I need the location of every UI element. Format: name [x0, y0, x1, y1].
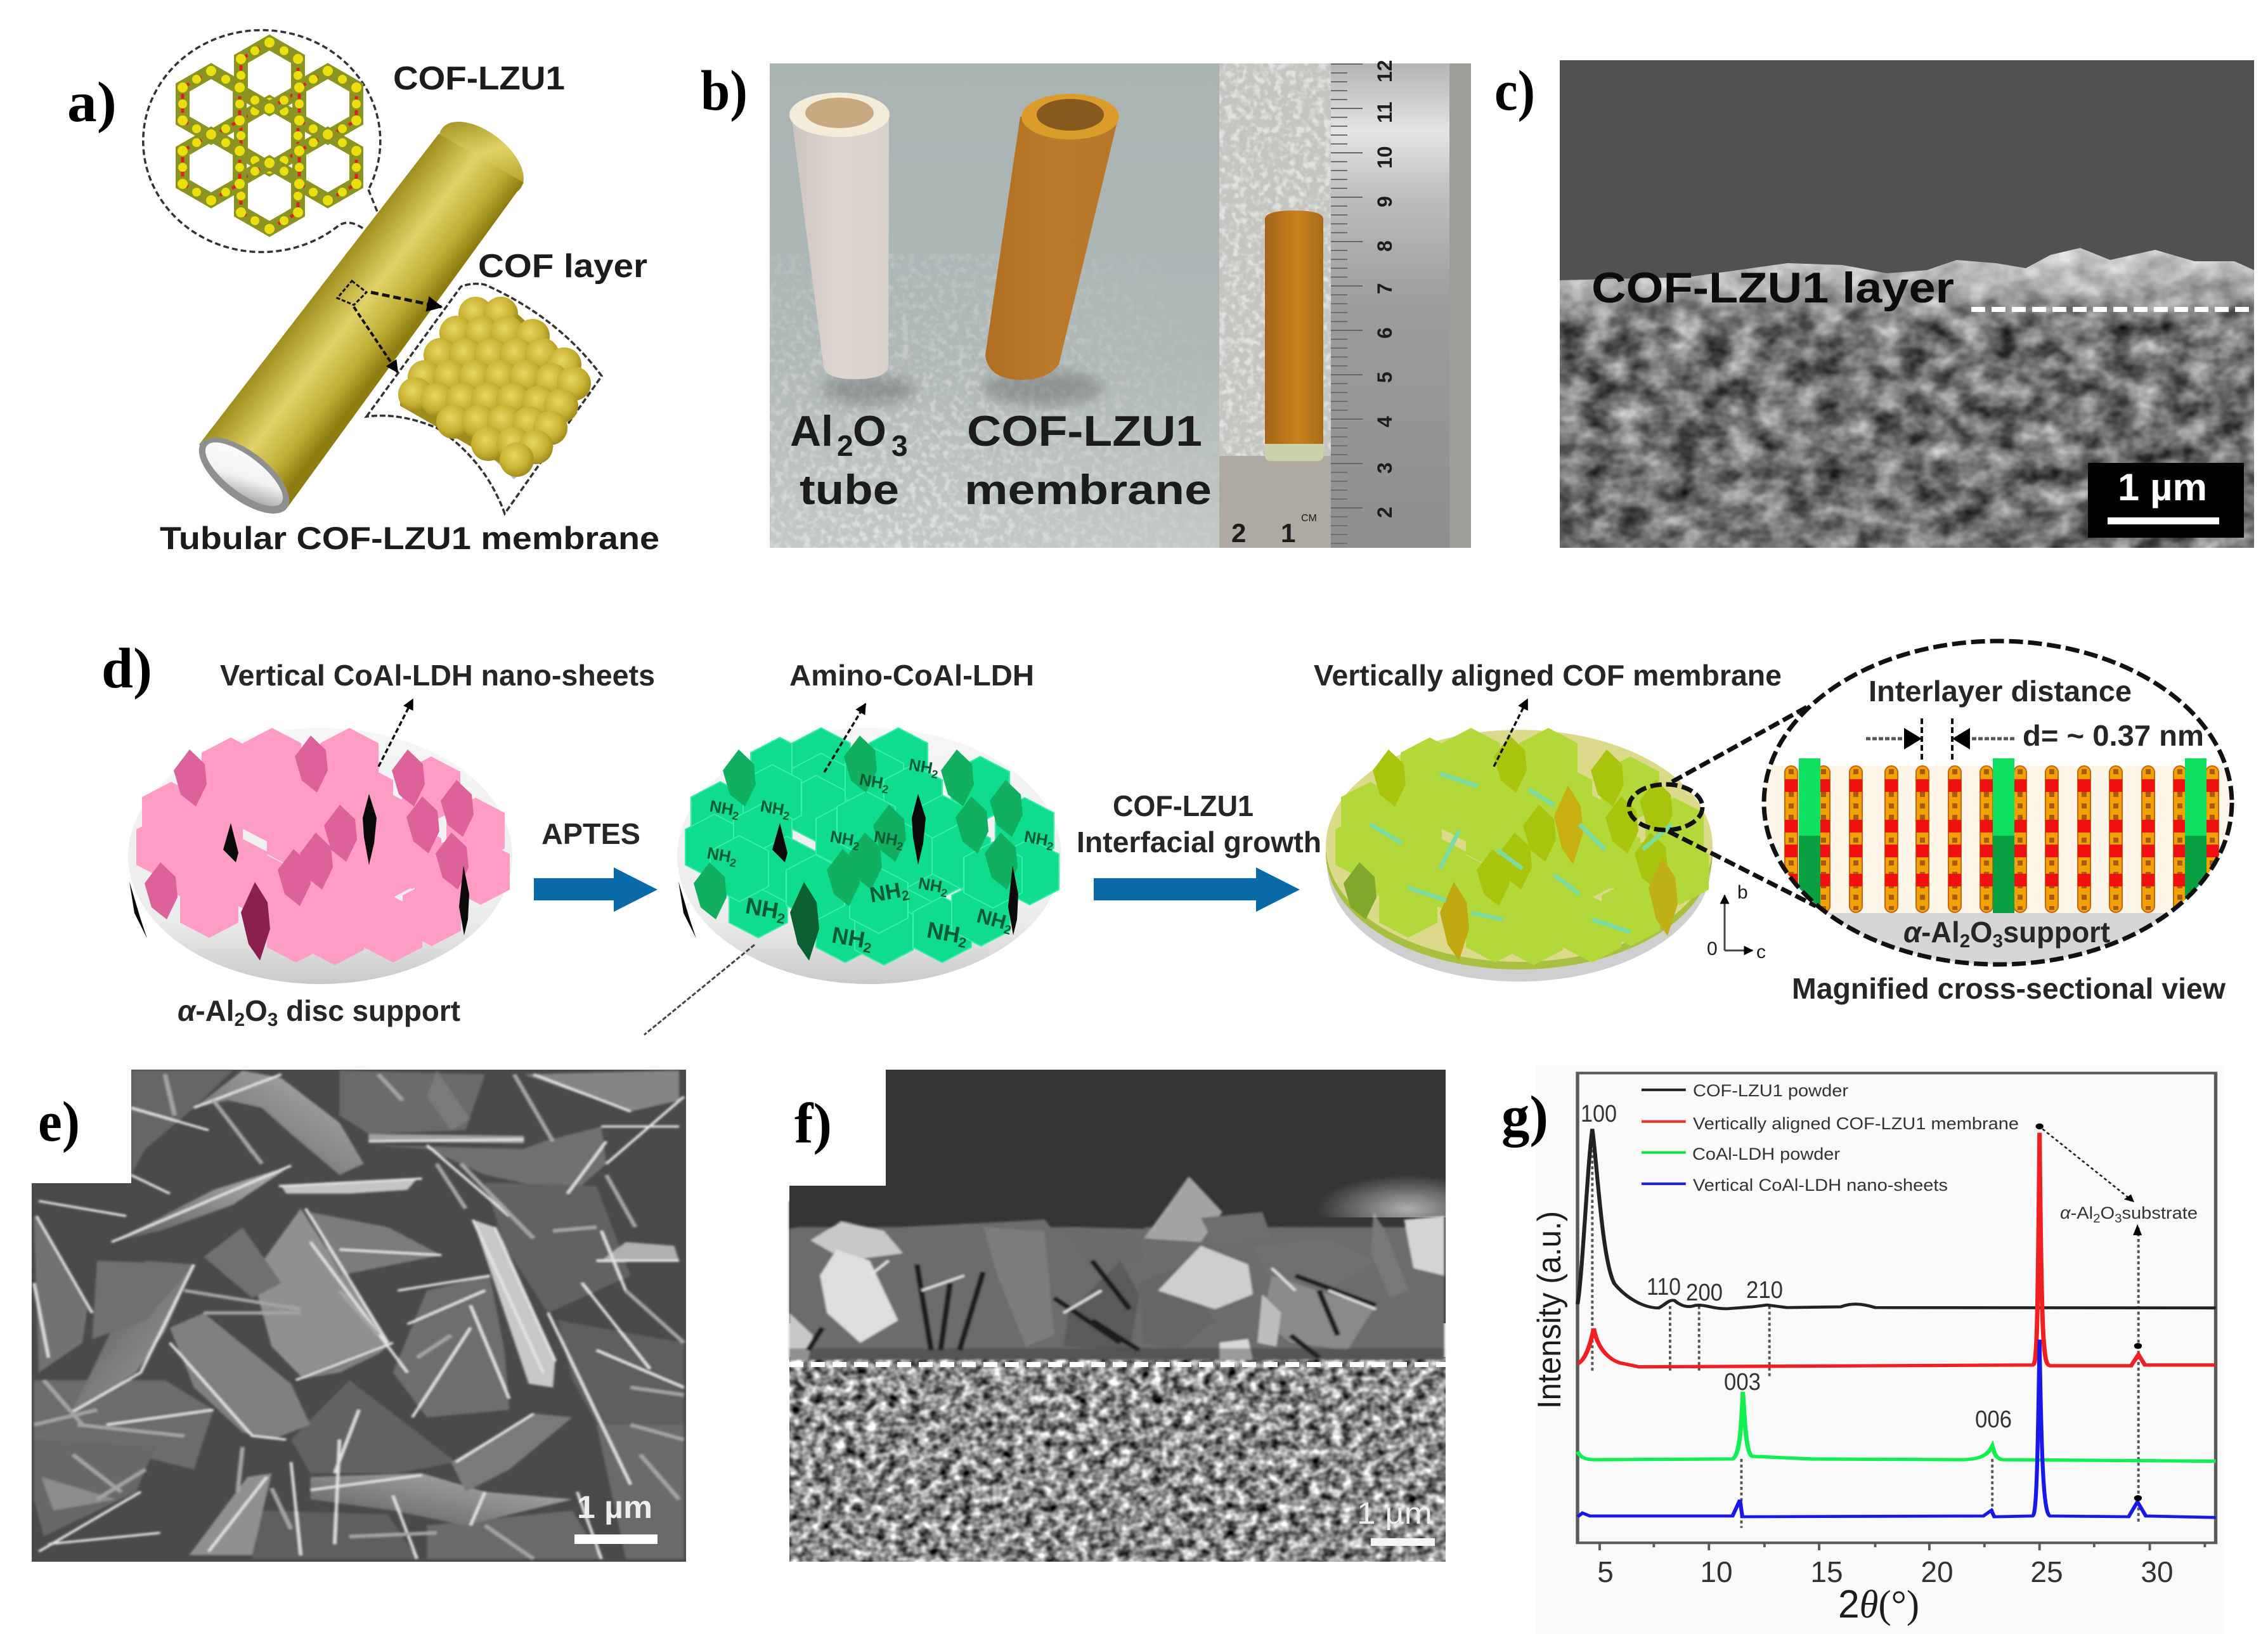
- heading: amino: Amino-CoAl-LDH: [789, 659, 1034, 692]
- crystal axes: [1707, 882, 1766, 963]
- substrate label: substrate: [2122, 1203, 2198, 1222]
- magnified view caption: Magnified cross-sectional view: [1792, 972, 2226, 1005]
- green disc: NH: [830, 922, 867, 953]
- substrate label: 3: [2115, 1212, 2122, 1226]
- x tick labels: [1597, 1555, 2174, 1588]
- SEM image f: [789, 1070, 1446, 1562]
- green disc: NH: [759, 796, 786, 819]
- arrow to pink disc label: [379, 699, 413, 767]
- dashed interface line f: [789, 1362, 1446, 1367]
- black curve: COF-LZU1 powder: [1578, 1129, 2216, 1309]
- pink disc: [128, 728, 512, 984]
- legend line samples: [1642, 1090, 1686, 1184]
- SEM image: [1560, 60, 2254, 548]
- scale bar 1 µm: [2088, 463, 2244, 538]
- shadows under tubes: [821, 370, 1103, 406]
- COF layer patch with spheres: [366, 284, 602, 514]
- green disc: 2: [957, 934, 968, 951]
- green disc: 2: [1002, 923, 1013, 938]
- panel a: tubular COF-LZU1 membrane schematic: [67, 30, 659, 556]
- heading: vertically aligned membrane: Vertically aligned COF membrane: [1314, 659, 1782, 692]
- green disc: 2: [930, 767, 939, 781]
- green disc: 2: [881, 782, 890, 796]
- crystal axes: 0: [1707, 938, 1718, 959]
- COF membrane tube: [985, 94, 1119, 380]
- x tick labels: 30: [2141, 1555, 2174, 1588]
- legend labels: Vertical CoAl-LDH nano-sheets: [1693, 1176, 1948, 1195]
- COF layer label: COF layer: [478, 248, 647, 285]
- panel label e: e): [38, 1091, 80, 1153]
- alumina support label: support: [2003, 916, 2110, 949]
- green disc: NH: [858, 770, 885, 793]
- green disc: 2: [900, 887, 910, 904]
- green disc: 2: [782, 809, 791, 823]
- layer label: COF-LZU1 layer: [1591, 264, 1954, 312]
- scale bar f: [1357, 1497, 1435, 1546]
- green curve: CoAl-LDH powder: [1578, 1392, 2216, 1461]
- callout bubble with COF lattice: [143, 30, 388, 252]
- APTES label: APTES: [541, 817, 640, 850]
- alumina support label: O: [1970, 916, 1993, 949]
- green disc: NH: [917, 873, 943, 897]
- green disc: NH: [1023, 827, 1049, 850]
- green disc: NH: [868, 878, 903, 907]
- legend labels: CoAl-LDH powder: [1692, 1144, 1840, 1164]
- yellow-green COF disc: [1326, 728, 1713, 982]
- right photo with ruler: 1: [1281, 518, 1295, 548]
- right photo with ruler: 2: [1231, 518, 1246, 548]
- right photo with ruler: 2: [1373, 507, 1396, 518]
- white label notch: [32, 1068, 131, 1183]
- green disc: 2: [1046, 840, 1054, 853]
- red curve: vertically aligned membrane: [1578, 1132, 2216, 1367]
- plot frame and ticks: [1578, 1073, 2216, 1550]
- green disc: NH: [907, 755, 934, 777]
- green disc: 2: [775, 910, 786, 927]
- alumina tube: [789, 93, 890, 379]
- scale bar f: 1 µm: [1357, 1497, 1432, 1531]
- panel label b: b): [701, 60, 748, 122]
- peak labels: 110: [1647, 1274, 1681, 1300]
- COF-LZU1 label: COF-LZU1: [393, 60, 565, 97]
- panel b: photographs of tubes: [701, 60, 1471, 548]
- green disc: NH: [925, 916, 962, 948]
- right photo with ruler: [1219, 60, 1471, 548]
- right photo with ruler: 7: [1373, 283, 1396, 294]
- blue curve: vertical nano-sheets: [1578, 1340, 2216, 1517]
- x tick labels: 25: [2030, 1555, 2063, 1588]
- right photo with ruler: 4: [1373, 416, 1396, 427]
- white label notch f: [789, 1068, 886, 1186]
- blue arrow 1: [534, 867, 658, 912]
- alumina support label: 3: [1993, 931, 2003, 952]
- scale bar e: 1 µm: [577, 1489, 652, 1525]
- substrate label: α-Al: [2060, 1203, 2092, 1222]
- green disc: 2: [731, 809, 740, 823]
- COF-LZU1 photo label: COF-LZU1: [967, 407, 1202, 455]
- blue arrow 2: [1094, 867, 1300, 912]
- green disc: 2: [852, 840, 860, 853]
- panel label d: d): [101, 637, 152, 700]
- XRD curves and guides: [1578, 1090, 2216, 1528]
- green disc: 2: [940, 886, 949, 900]
- green disc: 2: [729, 856, 737, 870]
- substrate label: O: [2100, 1203, 2115, 1222]
- dashed interface line: [1971, 307, 2254, 312]
- disc support caption: α-Al: [178, 994, 235, 1027]
- panel g: XRD chart: [1501, 1065, 2224, 1634]
- x tick labels: 5: [1597, 1555, 1614, 1588]
- alumina support label: 2: [1960, 931, 1970, 952]
- magnified cross-section circle: [1763, 641, 2235, 970]
- interlayer distance arrows: [1866, 718, 2014, 760]
- peak labels: [1581, 1101, 2012, 1433]
- disc support caption: 3: [268, 1009, 278, 1030]
- green disc: NH: [829, 827, 855, 850]
- crystal axes: b: [1737, 882, 1748, 903]
- Al2O3 tube label: O: [853, 407, 886, 455]
- tube word: tube: [800, 466, 899, 513]
- disc support caption: 2: [234, 1009, 245, 1030]
- chart backdrop: [1536, 1065, 2224, 1634]
- peak labels: 003: [1724, 1369, 1761, 1396]
- d spacing value: d= ~ 0.37 nm: [2023, 719, 2204, 752]
- right photo with ruler: 5: [1373, 372, 1396, 383]
- zoom circle on disc and leader lines: [1629, 707, 1816, 906]
- panel label f: f): [794, 1093, 832, 1155]
- y axis title: Intensity (a.u.): [1531, 1211, 1568, 1409]
- right photo with ruler: 12: [1373, 60, 1396, 82]
- right photo with ruler: 8: [1373, 240, 1396, 252]
- peak labels: 006: [1975, 1406, 2012, 1433]
- disc support caption: O: [245, 994, 268, 1027]
- panel c: SEM cross-section of COF-LZU1 layer: [1494, 60, 2254, 548]
- scale bar 1 µm: 1 µm: [2118, 466, 2207, 509]
- left photo background: [770, 63, 1219, 548]
- green disc: NH: [706, 843, 732, 866]
- panel label g: g): [1501, 1085, 1548, 1148]
- Al2O3 tube label: 2: [837, 429, 853, 462]
- substrate arrows and peak dots: [2035, 1124, 2142, 1501]
- Al2O3 tube label: Al: [790, 407, 833, 455]
- right photo with ruler: CM: [1301, 513, 1317, 524]
- arrow to membrane label: [1494, 699, 1527, 767]
- panel label a: a): [67, 71, 117, 134]
- SEM image e: [32, 1070, 686, 1562]
- panel d: fabrication scheme: [101, 637, 2235, 1035]
- x tick labels: 15: [1810, 1555, 1843, 1588]
- dashed sample square and arrows: [337, 281, 441, 372]
- green disc: NH: [975, 904, 1009, 933]
- COF-LZU1 interfacial growth label: COF-LZU1: [1113, 789, 1254, 822]
- green disc: NH: [744, 892, 781, 924]
- alumina support label: α-Al: [1903, 916, 1960, 949]
- interlayer distance label: Interlayer distance: [1869, 675, 2132, 708]
- right photo with ruler: 10: [1373, 146, 1396, 169]
- peak labels: 200: [1686, 1280, 1723, 1306]
- panel e: SEM top view of nano-sheets: [32, 1068, 686, 1562]
- crystal axes: c: [1756, 942, 1766, 963]
- green disc: [677, 728, 1061, 984]
- thin leader line from green disc: [644, 945, 755, 1035]
- right photo with ruler: 11: [1373, 101, 1396, 123]
- green disc: NH: [872, 827, 899, 850]
- x axis title: 2θ(°): [1838, 1583, 1919, 1626]
- tubular membrane caption: Tubular COF-LZU1 membrane: [160, 521, 659, 556]
- COF-LZU1 interfacial growth label: Interfacial growth: [1077, 826, 1321, 859]
- green disc: 2: [862, 939, 872, 956]
- COF-LZU1 interfacial growth label: [1077, 789, 1321, 859]
- legend labels: COF-LZU1 powder: [1693, 1081, 1848, 1100]
- legend labels: [1692, 1081, 2019, 1195]
- heading: vertical nano-sheets: Vertical CoAl-LDH nano-sheets: [220, 659, 655, 692]
- right photo with ruler: 6: [1373, 327, 1396, 339]
- panel f: SEM cross-section of vertically aligned membrane: [789, 1068, 1446, 1562]
- peak labels: 210: [1746, 1277, 1783, 1304]
- right photo with ruler: 3: [1373, 462, 1396, 474]
- substrate label: 2: [2093, 1212, 2100, 1226]
- Al2O3 tube label: 3: [891, 429, 908, 462]
- legend labels: Vertically aligned COF-LZU1 membrane: [1693, 1114, 2019, 1133]
- panel label c: c): [1494, 60, 1535, 122]
- scale bar e: [574, 1489, 658, 1544]
- membrane word: membrane: [964, 466, 1212, 513]
- x tick labels: 10: [1700, 1555, 1733, 1588]
- disc support caption: disc support: [278, 994, 460, 1027]
- arrow to green disc label: [824, 704, 865, 772]
- x tick labels: 20: [1921, 1555, 1954, 1588]
- tube: [186, 107, 536, 528]
- right photo with ruler: 9: [1373, 196, 1396, 207]
- green disc: NH: [708, 796, 735, 819]
- green disc: 2: [895, 840, 904, 853]
- peak labels: 100: [1581, 1101, 1617, 1127]
